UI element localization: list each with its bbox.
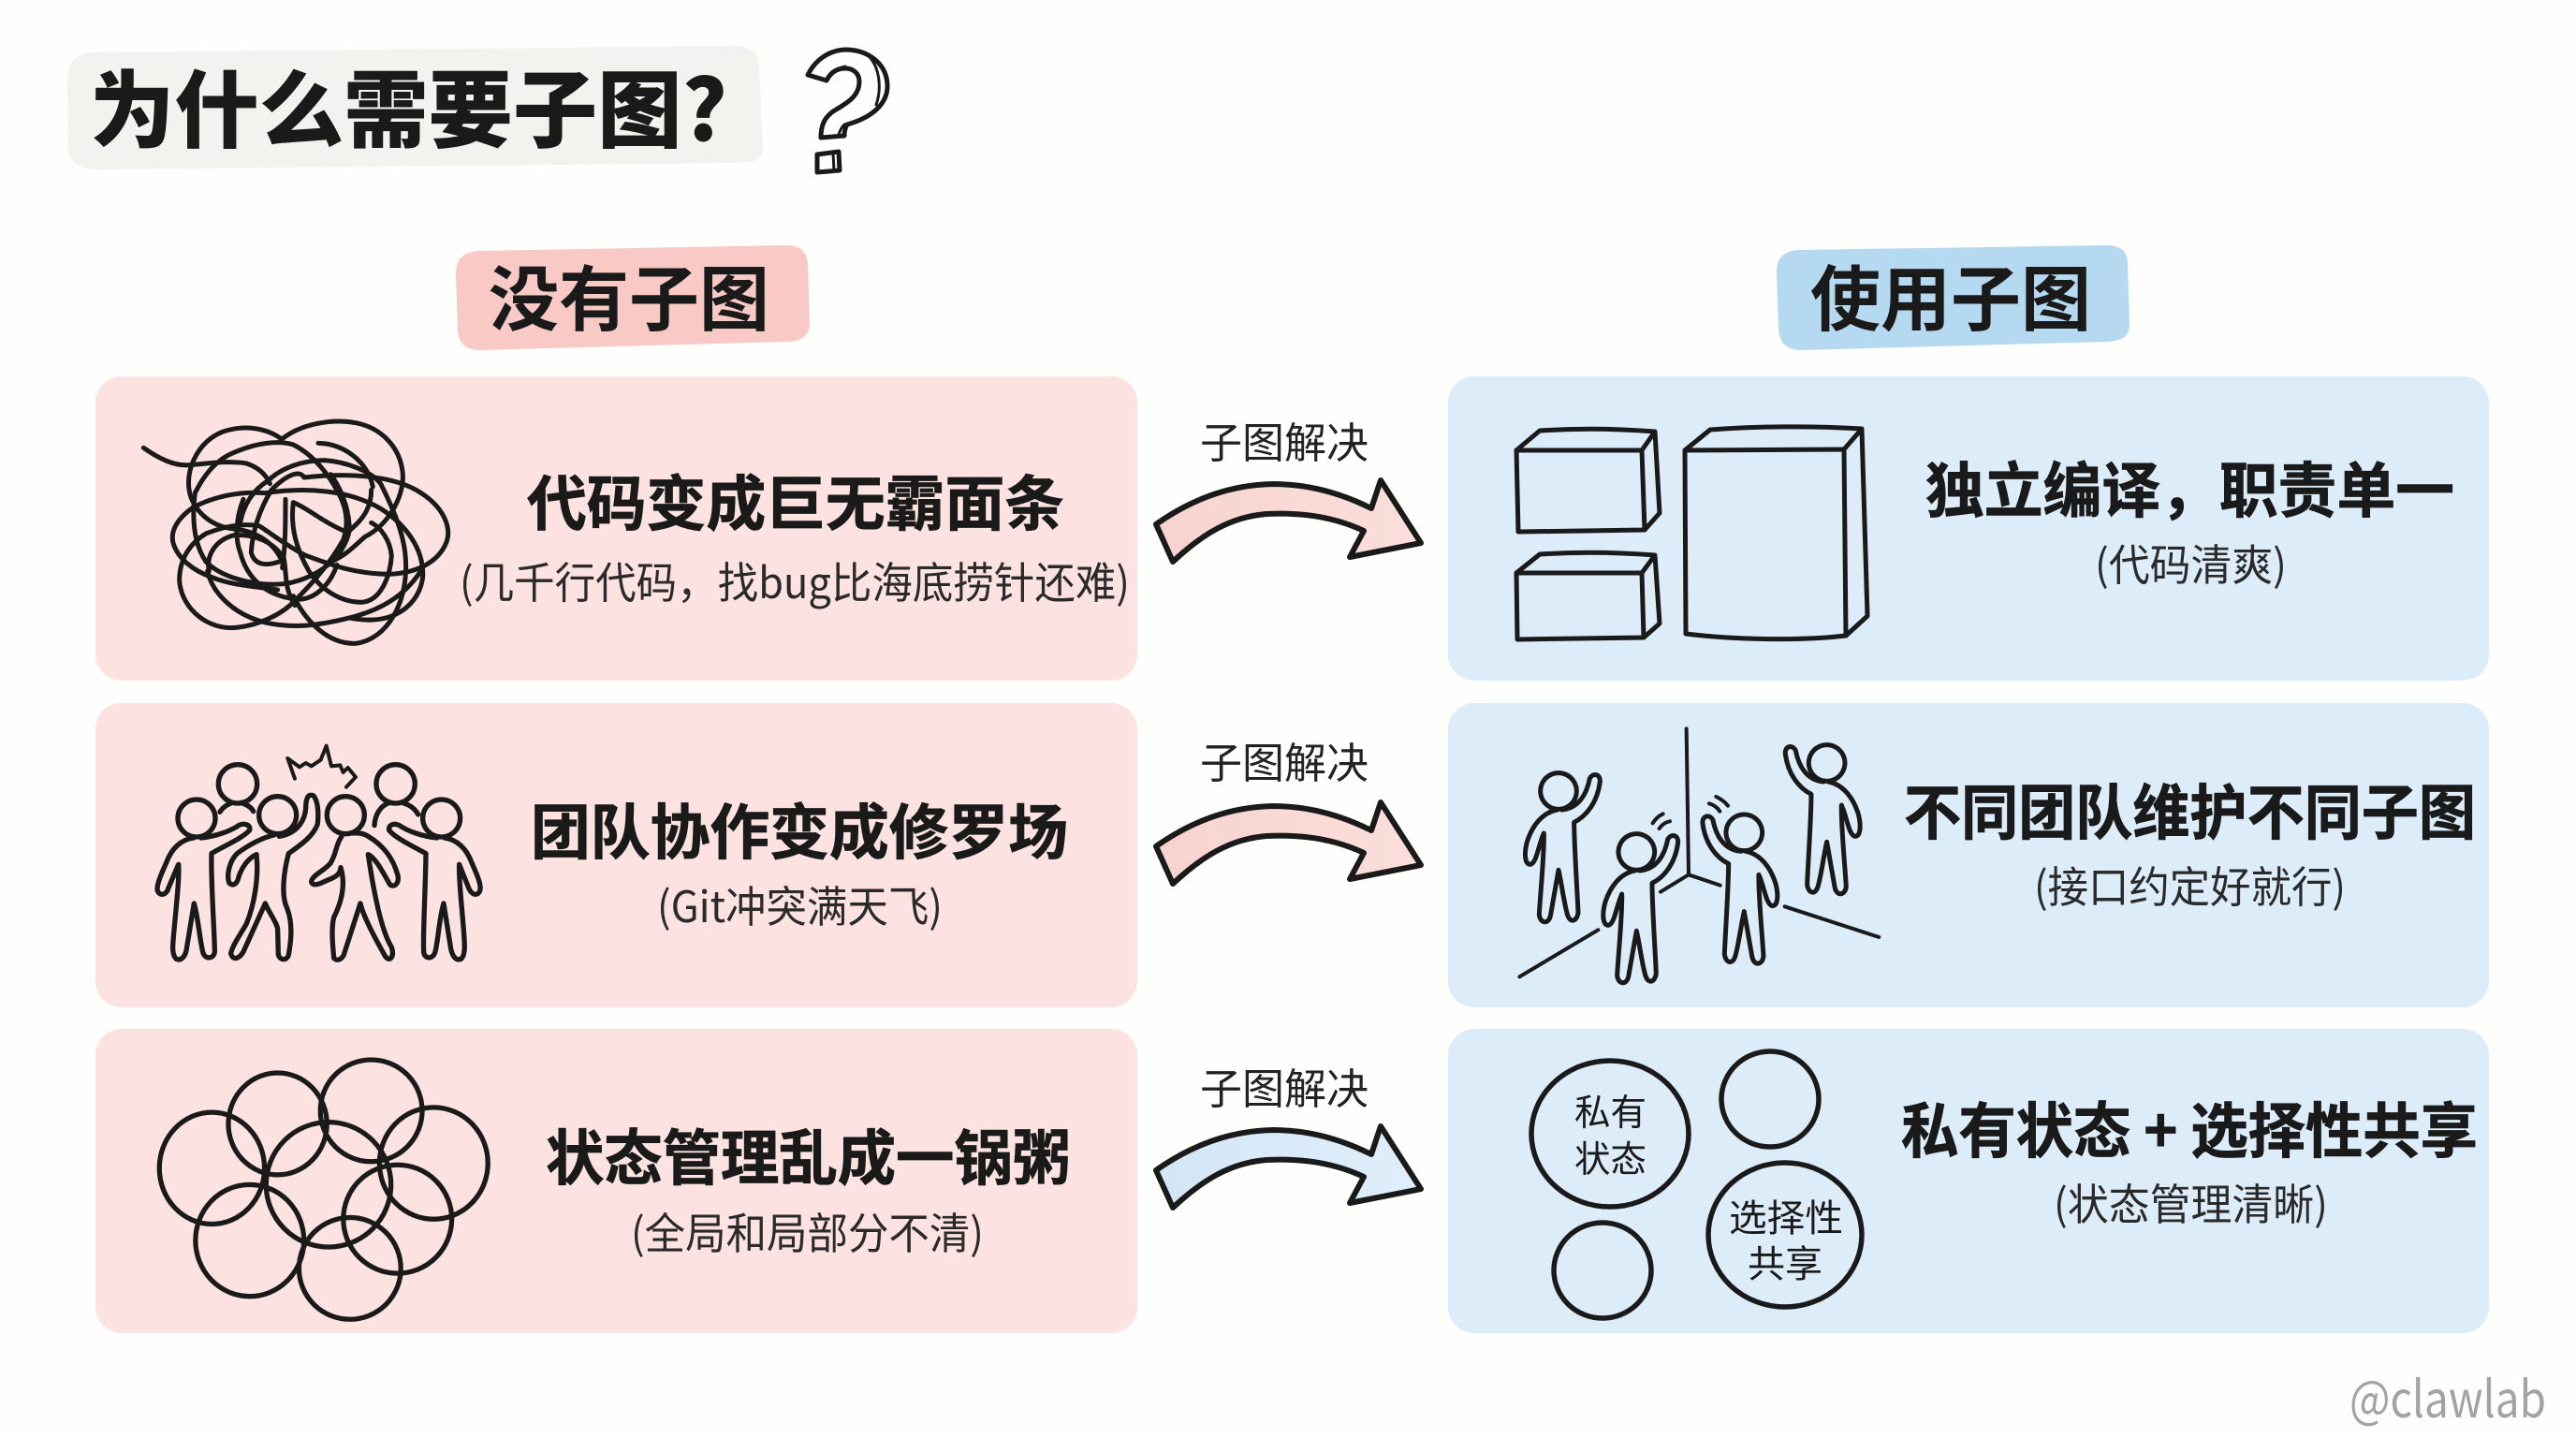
icon: tangled scribble xyxy=(143,421,448,643)
text: solution 2 note: (接口约定好就行) xyxy=(2034,854,2346,916)
arrow 1 with label: 子图解决 xyxy=(1200,409,1368,470)
watermark: @clawlab xyxy=(2349,1358,2546,1432)
icon: state circles xyxy=(1531,1051,1862,1318)
text: problem 3 note: (全局和局部分不清) xyxy=(631,1200,984,1262)
icon: crowded team xyxy=(157,746,480,960)
icon: state circles: 选择性 xyxy=(1729,1188,1843,1242)
arrow 2 with label xyxy=(1156,729,1421,884)
panel: problem 1 giant code xyxy=(95,376,1137,681)
heading: without subgraph: 没有子图 xyxy=(489,242,769,345)
icon: state circles: 状态 xyxy=(1574,1131,1647,1183)
text: problem 2 heading: 团队协作变成修罗场 xyxy=(531,785,1068,872)
text: problem 1 heading: 代码变成巨无霸面条 xyxy=(527,457,1064,543)
text: solution 1 heading: 独立编译，职责单一 xyxy=(1925,444,2454,530)
arrow 3 with label: 子图解决 xyxy=(1200,1055,1368,1116)
panel: solution 1 independent build xyxy=(1448,376,2489,681)
icon: question mark xyxy=(808,50,887,172)
icon: three boxes xyxy=(1516,427,1867,639)
panel: solution 2 teams xyxy=(1448,703,2489,1007)
arrow 1 with label xyxy=(1156,409,1421,562)
arrow 3 with label xyxy=(1156,1055,1421,1208)
text: problem 3 heading: 状态管理乱成一锅粥 xyxy=(546,1111,1071,1197)
icon: state circles: 共享 xyxy=(1748,1234,1822,1288)
title: 为什么需要子图? xyxy=(90,43,727,165)
icon: wall and separated teams xyxy=(1519,728,1879,983)
icon: overlapping circles xyxy=(159,1060,488,1319)
heading: with subgraph: 使用子图 xyxy=(1810,242,2091,345)
panel: solution 3 private state xyxy=(1448,1029,2489,1333)
panel: problem 2 team conflict xyxy=(95,703,1137,1007)
text: problem 2 note: (Git冲突满天飞) xyxy=(657,873,943,935)
panel: problem 3 state mess xyxy=(95,1029,1137,1333)
text: solution 1 note: (代码清爽) xyxy=(2095,532,2287,594)
text: solution 3 heading: 私有状态 + 选择性共享 xyxy=(1901,1084,2478,1170)
text: solution 3 note: (状态管理清晰) xyxy=(2054,1171,2328,1233)
arrow 2 with label: 子图解决 xyxy=(1200,729,1368,790)
text: problem 1 note: (几千行代码，找bug比海底捞针还难) xyxy=(460,550,1130,611)
text: solution 2 heading: 不同团队维护不同子图 xyxy=(1904,766,2476,852)
icon: state circles: 私有 xyxy=(1574,1084,1647,1137)
